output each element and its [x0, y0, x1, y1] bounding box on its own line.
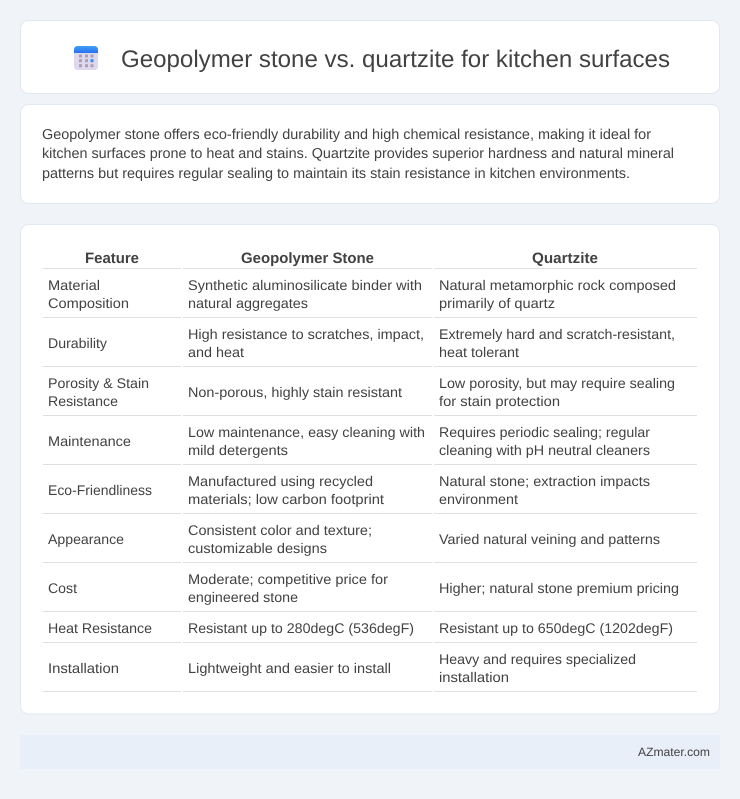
table header row: Geopolymer Stone: [241, 250, 374, 267]
panel: introduction: [20, 104, 720, 204]
row: eco-friendliness: Eco-Friendliness: [48, 482, 152, 498]
row: porosity and stain resistance: [48, 375, 675, 409]
row: maintenance: Low maintenance, easy cleaning with: [188, 424, 425, 440]
row: durability: heat tolerant: [439, 344, 519, 360]
row: installation: [48, 651, 636, 685]
row: appearance: Consistent color and texture;: [188, 522, 372, 538]
row: cost: Cost: [48, 580, 77, 596]
row: porosity and stain resistance: for stain protection: [439, 393, 560, 409]
row: durability: [48, 326, 675, 360]
row: material composition: Material: [48, 277, 100, 293]
row: cost: Moderate; competitive price for: [188, 571, 388, 587]
row: maintenance: cleaning with pH neutral cleaners: [439, 442, 650, 458]
intro paragraph: patterns but requires regular sealing to maintain its stain resistance in kitchen environments.: [42, 166, 630, 182]
row: material composition: Synthetic aluminosilicate binder with: [188, 277, 422, 293]
row: appearance: [48, 522, 660, 556]
panel: header: [20, 20, 720, 94]
title: Geopolymer stone vs. quartzite for kitchen surfaces: [121, 46, 670, 73]
row: installation: installation: [439, 669, 509, 685]
row: maintenance: Requires periodic sealing; regular: [439, 424, 650, 440]
row: appearance: Varied natural veining and patterns: [439, 531, 660, 547]
row: material composition: primarily of quartz: [439, 295, 555, 311]
table header row: Quartzite: [532, 250, 598, 267]
panel: comparison table: [20, 224, 720, 714]
row: heat resistance: Resistant up to 280degC (536degF): [188, 620, 414, 636]
row: eco-friendliness: [48, 473, 650, 507]
table header row: Feature: [85, 250, 139, 267]
row: installation: Installation: [48, 660, 119, 676]
row: eco-friendliness: materials; low carbon footprint: [188, 491, 384, 507]
row: eco-friendliness: Manufactured using recycled: [188, 473, 373, 489]
row: heat resistance: Heat Resistance: [48, 620, 152, 636]
row: porosity and stain resistance: Porosity & Stain: [48, 375, 149, 391]
row: installation: Lightweight and easier to install: [188, 660, 391, 676]
row: appearance: customizable designs: [188, 540, 327, 556]
row: cost: [48, 571, 679, 605]
row: eco-friendliness: environment: [439, 491, 518, 507]
row: installation: Heavy and requires specialized: [439, 651, 636, 667]
footer bar: [20, 735, 720, 769]
row: durability: Extremely hard and scratch-resistant,: [439, 326, 675, 342]
row: material composition: natural aggregates: [188, 295, 308, 311]
row: porosity and stain resistance: Low porosity, but may require sealing: [439, 375, 675, 391]
icon: calendar: [74, 46, 98, 70]
row: durability: High resistance to scratches, impact,: [188, 326, 424, 342]
row: heat resistance: Resistant up to 650degC (1202degF): [439, 620, 673, 636]
row: material composition: [48, 277, 676, 311]
row: material composition: Composition: [48, 295, 129, 311]
table header row: [85, 250, 598, 267]
row: durability: and heat: [188, 344, 244, 360]
row: durability: Durability: [48, 335, 107, 351]
row: cost: Higher; natural stone premium pricing: [439, 580, 679, 596]
row: porosity and stain resistance: Non-porous, highly stain resistant: [188, 384, 402, 400]
row: material composition: Natural metamorphic rock composed: [439, 277, 676, 293]
row: maintenance: mild detergents: [188, 442, 288, 458]
row: heat resistance: [48, 620, 673, 636]
intro paragraph: kitchen surfaces prone to heat and stains. Quartzite provides superior hardness and natural mineral: [42, 146, 674, 162]
intro paragraph: [42, 127, 674, 182]
intro paragraph: Geopolymer stone offers eco-friendly durability and high chemical resistance, making it ideal for: [42, 127, 651, 143]
row: cost: engineered stone: [188, 589, 298, 605]
footer source text: AZmater.com: [638, 745, 710, 759]
row: eco-friendliness: Natural stone; extraction impacts: [439, 473, 650, 489]
row: porosity and stain resistance: Resistance: [48, 393, 118, 409]
row: appearance: Appearance: [48, 531, 124, 547]
row: maintenance: [48, 424, 650, 458]
row: maintenance: Maintenance: [48, 433, 131, 449]
